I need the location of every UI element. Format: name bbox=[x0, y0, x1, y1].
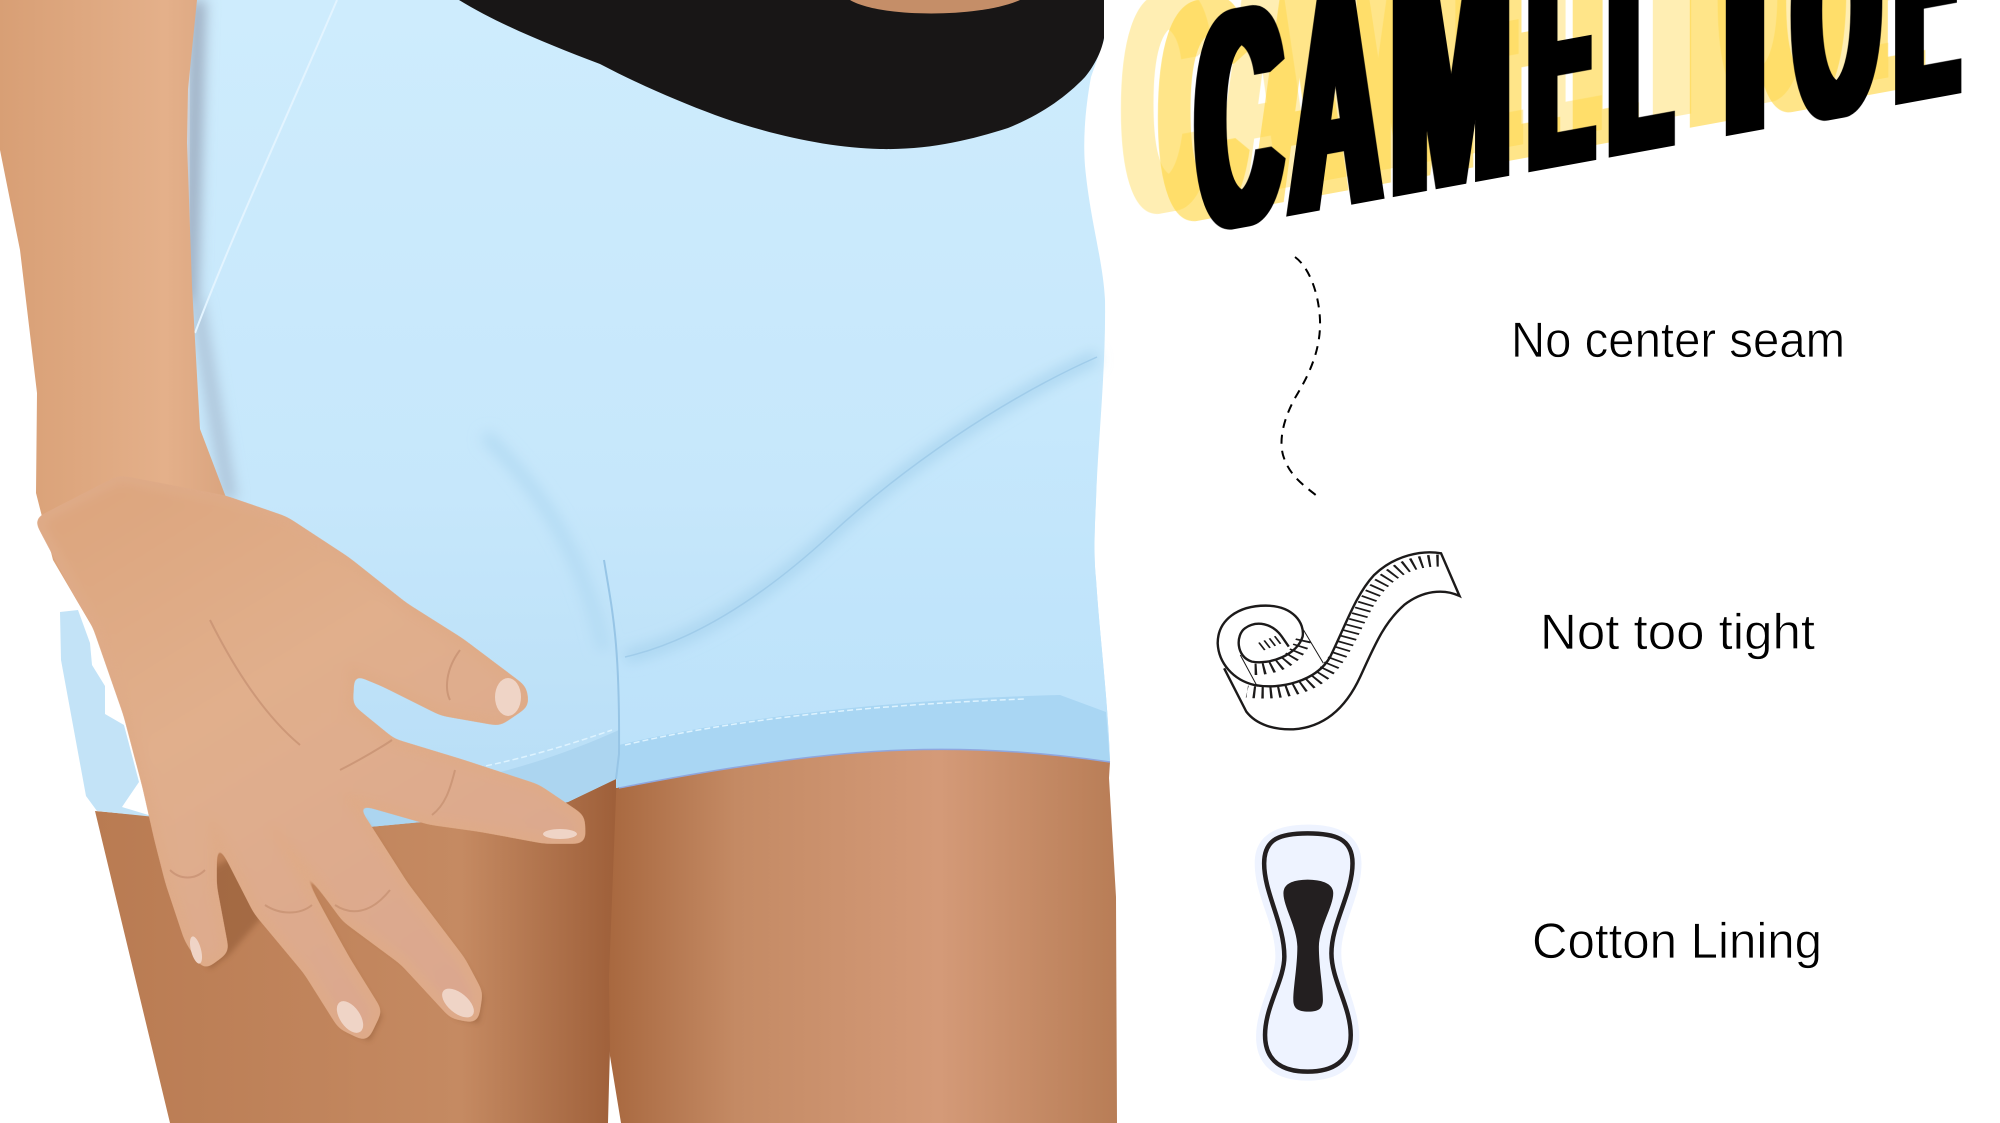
icon: dashed seam line bbox=[1282, 257, 1320, 496]
right thigh bbox=[609, 735, 1117, 1123]
label: Cotton Lining: Cotton Lining bbox=[1532, 913, 1822, 969]
icon: cotton lining bbox=[1255, 825, 1361, 1081]
back of shorts bbox=[60, 610, 155, 817]
title: CAMEL TOE bbox=[1124, 0, 1957, 313]
shorts creases and stitching bbox=[195, 0, 1110, 788]
tape band bbox=[1218, 552, 1460, 729]
shorts shading bbox=[190, 0, 1097, 657]
title yellow shadow far bbox=[1124, 0, 1884, 284]
lining gusset bbox=[1283, 880, 1333, 1012]
photo: model wearing light blue shorts bbox=[0, 0, 1117, 1123]
skin above waistband bbox=[850, 0, 1020, 14]
tape tick marks upper bbox=[1247, 561, 1439, 693]
palm and fingers bbox=[40, 480, 581, 1036]
hand bbox=[40, 480, 581, 1041]
right leg hem bbox=[616, 695, 1110, 788]
shorts bbox=[190, 0, 1110, 827]
icon: tape measure bbox=[1218, 552, 1460, 729]
finger nails bbox=[188, 678, 577, 1037]
label: Not too tight: Not too tight bbox=[1540, 604, 1815, 660]
tape inner fold bbox=[1240, 630, 1323, 687]
left leg hem bbox=[345, 730, 619, 827]
label: No center seam: No center seam bbox=[1511, 312, 1845, 368]
arm bbox=[0, 0, 300, 640]
title black text bbox=[1197, 0, 1957, 299]
tape tick marks core bbox=[1261, 638, 1282, 647]
lining outline bbox=[1264, 833, 1353, 1072]
hand shadow on thigh bbox=[175, 819, 483, 1041]
knuckle shading bbox=[170, 620, 460, 912]
left thigh bbox=[95, 760, 618, 1123]
right leg panel bbox=[616, 357, 1110, 788]
lining halo bbox=[1255, 825, 1361, 1081]
title yellow shadow near bbox=[1161, 0, 1921, 291]
black waistband bbox=[459, 0, 1104, 149]
tape tick marks inner bbox=[1252, 640, 1304, 669]
